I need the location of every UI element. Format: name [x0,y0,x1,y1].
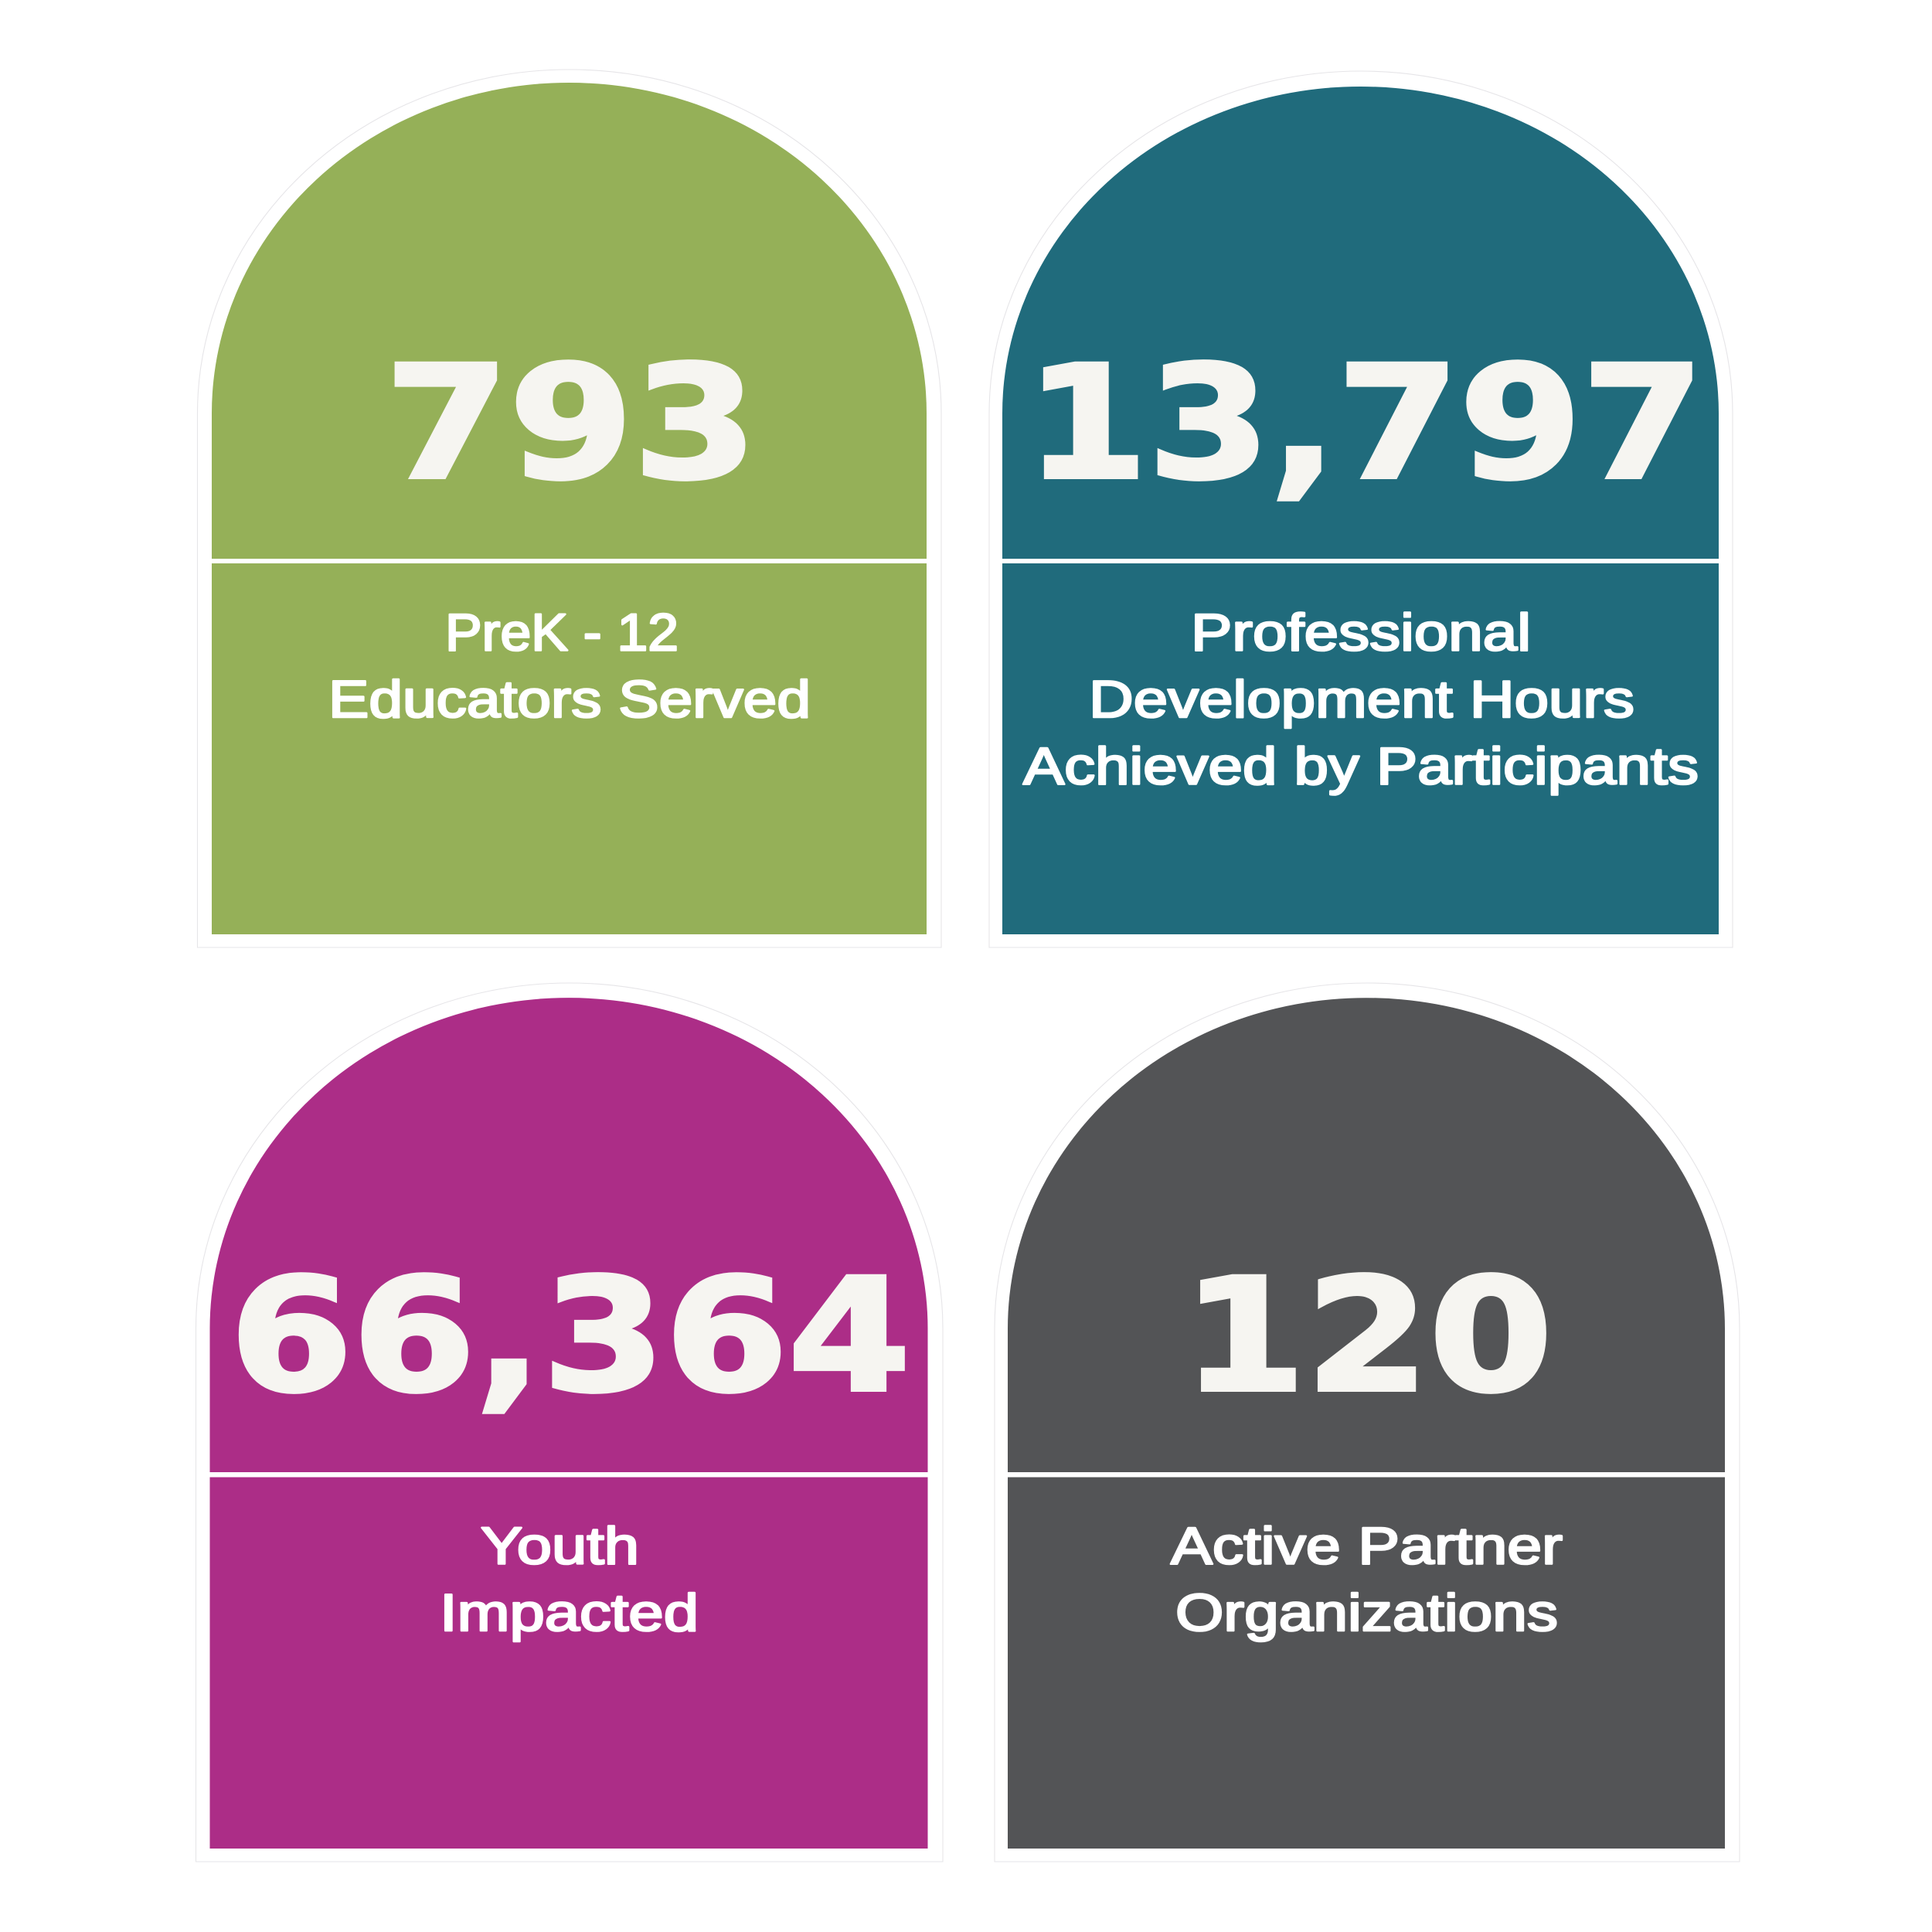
label: youth impacted [440,1516,699,1642]
panel: youth impacted [196,983,943,1862]
label: professional development hours: Professional [1191,603,1531,662]
number: 793: 793 [385,332,757,515]
label: professional development hours: Achieved by Participants [1023,737,1699,796]
number: 13,797: 13,797 [1026,332,1704,515]
label: youth impacted: Youth [481,1516,639,1575]
label: PreK-12 educators served: PreK - 12 [445,603,679,662]
label: active partner organizations: Organizations [1175,1583,1558,1642]
label: active partner organizations: Active Partner [1171,1516,1563,1575]
number: 120: 120 [1182,1244,1553,1427]
panel: professional development hours [989,71,1733,947]
label: active partner organizations [1171,1516,1563,1642]
label: professional development hours [1023,603,1699,796]
number: 66,364: 66,364 [230,1244,910,1427]
panel: active partner organizations [995,983,1740,1862]
label: youth impacted: Impacted [440,1583,699,1642]
label: professional development hours: Development Hours [1089,670,1634,729]
label: PreK-12 educators served: Educators Served [328,670,811,729]
label: PreK-12 educators served [328,603,811,729]
panel: PreK-12 educators served [198,70,941,947]
